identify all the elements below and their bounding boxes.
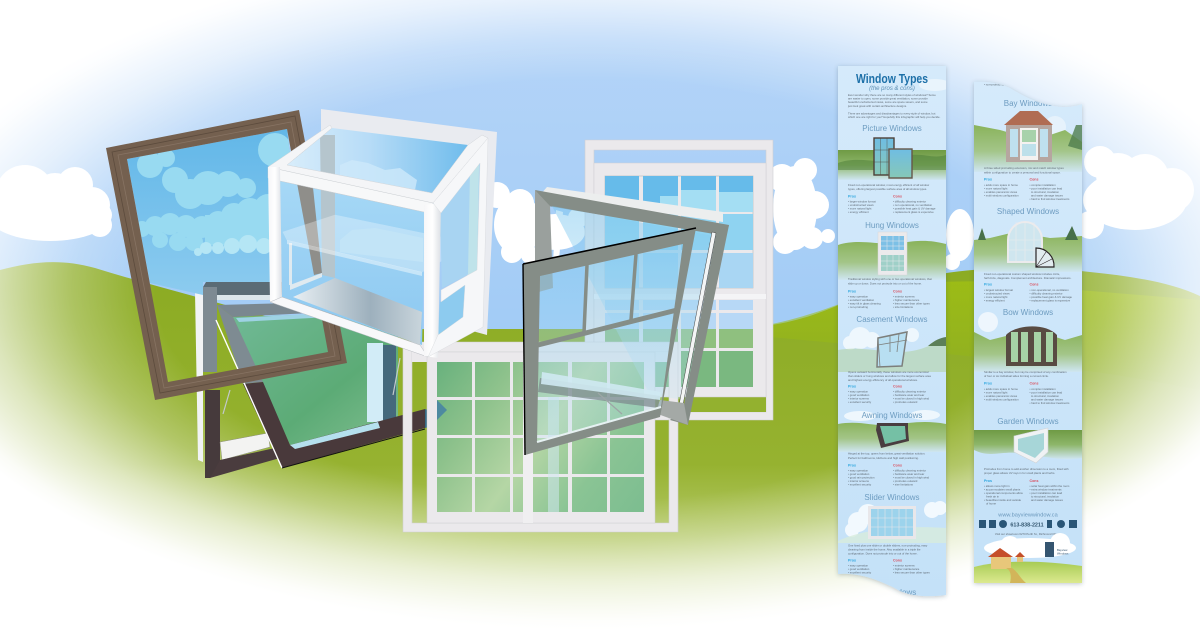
section: Bow Windows: • complex installation	[1030, 387, 1056, 391]
section: Picture Windows: Pros	[848, 194, 856, 198]
garden window	[268, 109, 497, 358]
glass shelf	[283, 215, 470, 272]
section: Picture Windows: • possible heat gain & UV damage	[893, 206, 936, 210]
section: Bow Windows: and water damage issues	[1031, 398, 1063, 402]
interior glass	[287, 128, 468, 193]
section: Bow Windows: • enables panoramic views	[984, 394, 1018, 398]
header: just look great with certain architecture designs.	[847, 104, 907, 108]
footer: contact and logos: www.bayviewwindow.ca	[997, 512, 1059, 518]
section: Casement Windows: Cons	[893, 384, 902, 388]
section: Slider Windows: • easy operation	[848, 564, 869, 568]
footer: contact and logos: Visit our showroom 6270 Perth St., Richmond Ottawa	[995, 532, 1062, 536]
section: Casement Windows: • good ventilation	[848, 393, 870, 397]
section: Picture Windows: Cons	[893, 194, 902, 198]
section: Bow Windows: • multi window configuration	[984, 398, 1019, 402]
casement window	[523, 187, 729, 455]
section: Bay Windows: to structural, insulation	[1031, 190, 1059, 194]
section: Picture Windows: • larger window format	[848, 200, 876, 204]
section: Slider Windows: One fixed plus one slider or double sliders, non-protruding, easy	[848, 544, 928, 548]
section: Shaped Windows: Pros	[984, 282, 992, 286]
section: Garden Windows: proper glass allows UV rays in for small plants and herbs.	[984, 471, 1055, 475]
casement sash	[523, 228, 696, 455]
section: Hung Windows: • higher maintenance	[893, 298, 920, 302]
header: (the pros & cons)	[869, 86, 915, 92]
section: Hung Windows: Cons	[893, 290, 902, 294]
section: Hung Windows: Hung Windows	[865, 221, 919, 230]
section: Garden Windows: to structural, insulation	[1031, 494, 1059, 498]
section: Hung Windows: • size limitations	[893, 305, 914, 309]
clouds: centre	[484, 158, 974, 270]
brown picture window	[106, 110, 347, 400]
logo: Bayview Windows: Windows	[1057, 552, 1069, 556]
section: Casement Windows: • hardware wear and tear	[893, 393, 924, 397]
header	[848, 74, 946, 118]
section: Casement Windows: Casement Windows	[856, 315, 928, 324]
section: Casement Windows: • easy operation	[848, 390, 869, 394]
clouds: left	[0, 165, 112, 241]
section: Slider Windows: Pros	[848, 558, 856, 562]
section: Hung Windows: slide up or down. Does not protrude into or out of the home.	[848, 282, 922, 286]
section: Casement Windows: than sliders or hung windows and allow for the largest surface area	[848, 374, 931, 378]
header: There are advantages and disadvantages to every style of window, but	[848, 112, 936, 116]
hung window (back right)	[585, 140, 773, 420]
section: Hung Windows: • easy operation	[848, 294, 869, 298]
section: Shaped Windows: • difficulty cleaning exterior	[1030, 292, 1063, 296]
slider window (bottom centre)	[403, 342, 678, 532]
section: Garden Windows: • beautifies inside and outside	[984, 498, 1021, 502]
section: Shaped Windows: Cons	[1030, 282, 1038, 286]
section: Shaped Windows: • replacement glass is expensive	[1030, 298, 1071, 302]
section: Awning Windows: • excellent security	[848, 482, 872, 486]
infographic strip: Window Types, part 1	[838, 66, 951, 597]
section: Bow Windows: • poor installation can lead	[1030, 390, 1063, 394]
section: Hung Windows: • exterior screens	[893, 294, 915, 298]
header: Ever wonder why there are so many different styles of windows? Some	[848, 93, 936, 97]
section: Shaped Windows: Fixed non-operational custom shaped window includes circle,	[984, 272, 1060, 276]
section: Picture Windows: • more natural light	[848, 206, 872, 210]
section: Bay Windows: • poor installation can lead	[1030, 186, 1063, 190]
section: Bow Windows: to structural, insulation	[1031, 394, 1059, 398]
section: Bay Windows: Bay Windows	[1004, 99, 1052, 108]
section: Slider Windows: • good ventilation	[848, 567, 870, 571]
awning sash	[216, 302, 455, 468]
section: Bay Windows: Cons	[1030, 178, 1038, 182]
footer: contact and logos: 613-838-2211	[1010, 522, 1044, 528]
section: Shaped Windows: • possible heat gain & UV damage	[1030, 295, 1072, 299]
section: Slider Windows: configuration. Does not protrude into or out of the home.	[848, 552, 918, 556]
footer: house and hills illustration	[974, 533, 1082, 583]
section: Hung Windows: Pros	[848, 290, 856, 294]
section: Shaped Windows	[974, 207, 1082, 302]
section: Slider Windows: • higher maintenance	[893, 567, 920, 571]
section: Garden Windows: and water damage issues	[1031, 498, 1063, 502]
section: Picture Windows: • replacement glass is expensive	[893, 210, 934, 214]
section: Awning Windows: • must be closed in high wind	[893, 476, 930, 480]
section: Garden Windows: Pros	[984, 479, 992, 483]
header: which one are right for you? Hopefully this infographic will help you decide.	[848, 115, 941, 119]
section: Casement Windows: and highest energy efficiency of all operational windows.	[848, 378, 918, 382]
section: Picture Windows: • non operational, no ventilation	[893, 203, 933, 207]
section: Garden Windows: Cons	[1030, 479, 1038, 483]
section: Hung Windows	[838, 221, 946, 309]
clouds: right	[1076, 146, 1194, 239]
frame pieces	[268, 125, 488, 205]
header: Window Types	[856, 71, 928, 86]
section: Casement Windows: Opens outward horizontally, these windows are more economical	[848, 370, 929, 374]
section: Bow Windows: Bow Windows	[1003, 308, 1053, 317]
section: Awning Windows: • protrudes outward	[893, 479, 918, 483]
section: Hung Windows: • excellent ventilation	[848, 298, 875, 302]
section: Garden Windows: • poor installation can lead	[1030, 491, 1063, 495]
section: Awning Windows: • hardware wear and tear	[893, 472, 924, 476]
section: Bow Windows: of four or six individual sides forming a curved circle.	[984, 374, 1049, 378]
section: Garden Windows: • solar heat gain within the room	[1030, 484, 1070, 488]
section: Garden Windows: • operational components allow	[984, 491, 1024, 495]
section: Shaped Windows: Shaped Windows	[997, 207, 1059, 216]
section: Awning Windows: • easy operation	[848, 468, 869, 472]
section: Picture Windows: Fixed non-operational window, most energy efficient of all window	[848, 183, 930, 187]
section: Shaped Windows: • more natural light	[984, 295, 1008, 299]
section: Awning Windows: Pros	[848, 464, 856, 468]
section: Picture Windows: • energy efficient	[848, 210, 869, 214]
section: Bay Windows: A three sided protruding extension, mix and match window types	[984, 166, 1064, 170]
section: Awning Windows: • good ventilation	[848, 472, 870, 476]
section: Casement Windows: • excellent security	[848, 400, 872, 404]
section: Bow Windows: Cons	[1030, 382, 1038, 386]
section: Bay Windows: Pros	[984, 178, 992, 182]
section: Bay Windows: and water damage issues	[1031, 194, 1063, 198]
section: Garden Windows: • extra window treatments	[1030, 488, 1062, 492]
section: Slider Windows: • less secure than other types	[893, 570, 930, 574]
section: Garden Windows: of home	[986, 502, 997, 506]
section: Slider Windows: Cons	[893, 558, 902, 562]
section: Awning Windows: • size limitations	[893, 482, 914, 486]
section: Bay Windows: • enables panoramic views	[984, 190, 1018, 194]
section: Hung Windows: • non-protruding	[848, 305, 868, 309]
back plate	[321, 109, 497, 335]
header: are easier to open, some provide great ventilation, some provide	[848, 97, 928, 101]
section: Picture Windows: • difficulty cleaning exterior	[893, 200, 926, 204]
clouds seen through glass	[137, 133, 290, 251]
section: Picture Windows	[838, 124, 946, 214]
section: Shaped Windows: • non-operational, no ventilation	[1030, 288, 1069, 292]
section: Casement Windows: Pros	[848, 384, 856, 388]
section: Casement Windows: • interior screens	[848, 396, 869, 400]
slider glass panes	[437, 352, 644, 523]
section: Bow Windows: Similar to a bay window, but may be comprised of any combination	[984, 370, 1067, 374]
section: Bay Windows	[974, 99, 1082, 201]
section: Casement Windows: • must be closed in high wind	[893, 396, 930, 400]
section: Picture Windows: Picture Windows	[862, 124, 922, 133]
section: Slider Windows: cleaning from inside the home. Also available in a triple lite	[848, 548, 921, 552]
section: Slider Windows: Bay Windows	[868, 588, 916, 597]
section: Garden Windows	[974, 417, 1082, 506]
section: Bay Windows: • more natural light	[984, 186, 1008, 190]
section: Slider Windows: • excellent security	[848, 570, 872, 574]
section: Awning Windows: • interior screens	[848, 479, 869, 483]
section: Hung Windows: • less secure than other types	[893, 302, 930, 306]
section: Bow Windows: • adds more space in home	[984, 387, 1018, 391]
section: Awning Windows: Cons	[893, 464, 902, 468]
section: Bay Windows: • adds more space in home	[984, 183, 1018, 187]
section: Bay Windows: • multi window configuration	[984, 194, 1019, 198]
side glass	[440, 163, 480, 288]
hills	[0, 262, 1200, 630]
header: beautiful unobstructed views, some are space savers, and some	[848, 100, 928, 104]
logo: Bayview Windows	[1045, 542, 1069, 557]
infographic strip: Window Types, part 2: • non-protruding	[984, 82, 1004, 86]
section: Slider Windows: • exterior screens	[893, 564, 915, 568]
section: Awning Windows: Awning Windows	[862, 411, 922, 420]
section: Bay Windows: • complex installation	[1030, 183, 1056, 187]
section: Hung Windows: • easy tilt in glass cleaning	[848, 302, 881, 306]
section: Awning Windows: Hinged at the top, opens from below, great ventilation solution.	[848, 452, 925, 456]
section: Bow Windows: • more natural light	[984, 390, 1008, 394]
section: Casement Windows: • protrudes outward	[893, 400, 918, 404]
section: Shaped Windows: • unobstructed views	[984, 292, 1010, 296]
section: Garden Windows: • accommodates small plants	[984, 488, 1021, 492]
hung window glass panes	[605, 176, 753, 387]
section: Garden Windows: • allows more light in	[984, 484, 1010, 488]
section: Bow Windows: • hard to find window treatments	[1030, 401, 1070, 405]
section: Garden Windows: fresh air in	[986, 494, 1000, 498]
section: Picture Windows: types, offering largest possible surface area of all window types.	[848, 187, 927, 191]
section: Picture Windows: • unobstructed views	[848, 203, 874, 207]
section: Shaped Windows: • largest window format	[984, 288, 1013, 292]
section: Bow Windows	[974, 308, 1082, 405]
section: Slider Windows: Slider Windows	[864, 493, 920, 502]
section: Awning Windows: Perfect for bathrooms, kitchens and high wall positioning.	[848, 456, 919, 460]
section: Garden Windows: Protrudes from home to add another dimension to a room, fitted with	[984, 467, 1069, 471]
logo: Bayview Windows: Bayview	[1057, 548, 1068, 552]
section: Shaped Windows: • energy efficient	[984, 298, 1005, 302]
section: Bow Windows: Pros	[984, 382, 992, 386]
section: Bay Windows: within configuration to create a personal and functional space.	[984, 170, 1061, 174]
section: Casement Windows: • difficulty cleaning exterior	[893, 390, 926, 394]
section: Casement Windows	[838, 315, 946, 404]
awning window (back left)	[195, 282, 455, 478]
section: Hung Windows: Traditional window styling with one or two operational windows, that	[848, 277, 932, 281]
section: Slider Windows	[838, 493, 947, 597]
section: Garden Windows: Garden Windows	[997, 417, 1059, 426]
section: Awning Windows: • good rain protection	[848, 476, 875, 480]
section: Shaped Windows: half circle, diagonals. Complement architecture. Dramatic impressions.	[984, 276, 1072, 280]
section: Bay Windows: • hard to find window treatments	[1030, 197, 1070, 201]
infographic strip: Window Types, part 2	[974, 82, 1082, 583]
footer: contact and logos	[979, 512, 1077, 536]
section: Awning Windows: • difficulty cleaning exterior	[893, 468, 926, 472]
section: Awning Windows	[838, 410, 946, 486]
